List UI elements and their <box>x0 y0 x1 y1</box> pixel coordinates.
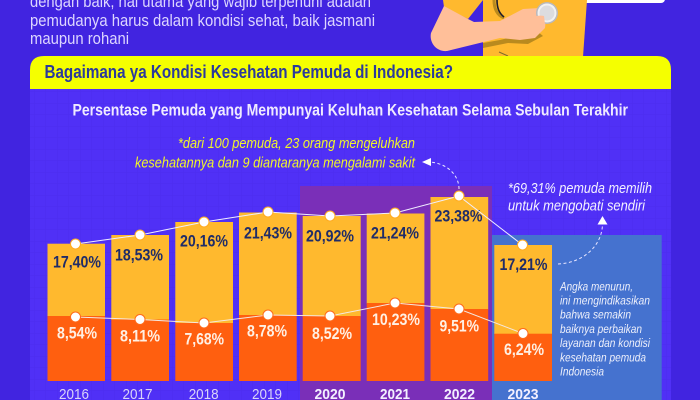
note: self-medication statistic: untuk mengobati sendiri <box>508 198 646 214</box>
illustration: person with stethoscope <box>431 0 665 57</box>
side explanation text: baiknya perbaikan <box>560 324 642 336</box>
side explanation text: Indonesia <box>560 366 604 378</box>
year labels <box>59 386 538 400</box>
bar 2021: 10,23% <box>372 311 420 329</box>
bar 2022: 23,38% <box>434 208 483 226</box>
arrow: from 2022 to note <box>422 158 459 189</box>
note: self-medication statistic <box>508 181 652 214</box>
side explanation text <box>559 282 650 378</box>
bar 2020: 8,52% <box>312 325 352 343</box>
note: complaint statistic: *dari 100 pemuda, 23 orang mengeluhkan <box>178 136 415 152</box>
bar 2023 <box>494 245 552 381</box>
intro text block <box>30 0 375 48</box>
bar 2021 <box>367 214 424 381</box>
bar 2021: 21,24% <box>371 224 419 242</box>
bar 2019 <box>239 212 297 381</box>
note: complaint statistic <box>135 136 416 172</box>
side explanation text: kesehatan pemuda <box>560 352 646 364</box>
bar 2018: 7,68% <box>184 330 224 348</box>
bar 2017 <box>111 235 169 381</box>
bar 2022 <box>430 197 488 381</box>
panel: chart background <box>30 88 671 400</box>
bar 2020: 20,92% <box>306 228 354 246</box>
side explanation text: ini mengindikasikan <box>560 296 650 308</box>
side explanation text: layanan dan kondisi <box>560 338 650 350</box>
bar 2017: 8,11% <box>120 328 160 346</box>
line: complaints <box>70 191 528 250</box>
bar 2019: 21,43% <box>244 224 292 242</box>
heading band <box>30 56 671 89</box>
note: self-medication statistic: *69,31% pemuda memilih <box>508 181 652 197</box>
bar 2023: 17,21% <box>500 256 548 274</box>
bar 2022: 9,51% <box>440 318 479 336</box>
note: complaint statistic: kesehatannya dan 9 diantaranya mengalami sakit <box>135 156 416 172</box>
bar 2019: 8,78% <box>247 322 287 340</box>
bar 2023: 6,24% <box>504 341 544 359</box>
intro text block: pemudanya harus dalam kondisi sehat, baik jasmani <box>30 11 375 30</box>
highlight: pandemic years <box>300 186 492 400</box>
heading band: Bagaimana ya Kondisi Kesehatan Pemuda di Indonesia? <box>44 62 453 82</box>
bar 2018 <box>175 222 233 381</box>
white caption box <box>530 0 665 3</box>
bar 2016: 8,54% <box>57 324 97 342</box>
bar 2016 <box>48 244 105 381</box>
side explanation text: Angka menurun, <box>559 282 633 294</box>
bar 2018: 20,16% <box>180 232 228 250</box>
line: sick <box>70 298 528 338</box>
bar 2016: 17,40% <box>53 254 101 272</box>
bar 2017: 18,53% <box>115 246 163 264</box>
stethoscope disc <box>536 2 558 24</box>
intro text block: maupun rohani <box>30 29 129 48</box>
arrow: from 2023 to note <box>558 216 608 264</box>
side explanation text: bahwa semakin <box>560 310 631 322</box>
bar 2020 <box>303 216 361 381</box>
highlight: 2023 <box>492 235 662 400</box>
